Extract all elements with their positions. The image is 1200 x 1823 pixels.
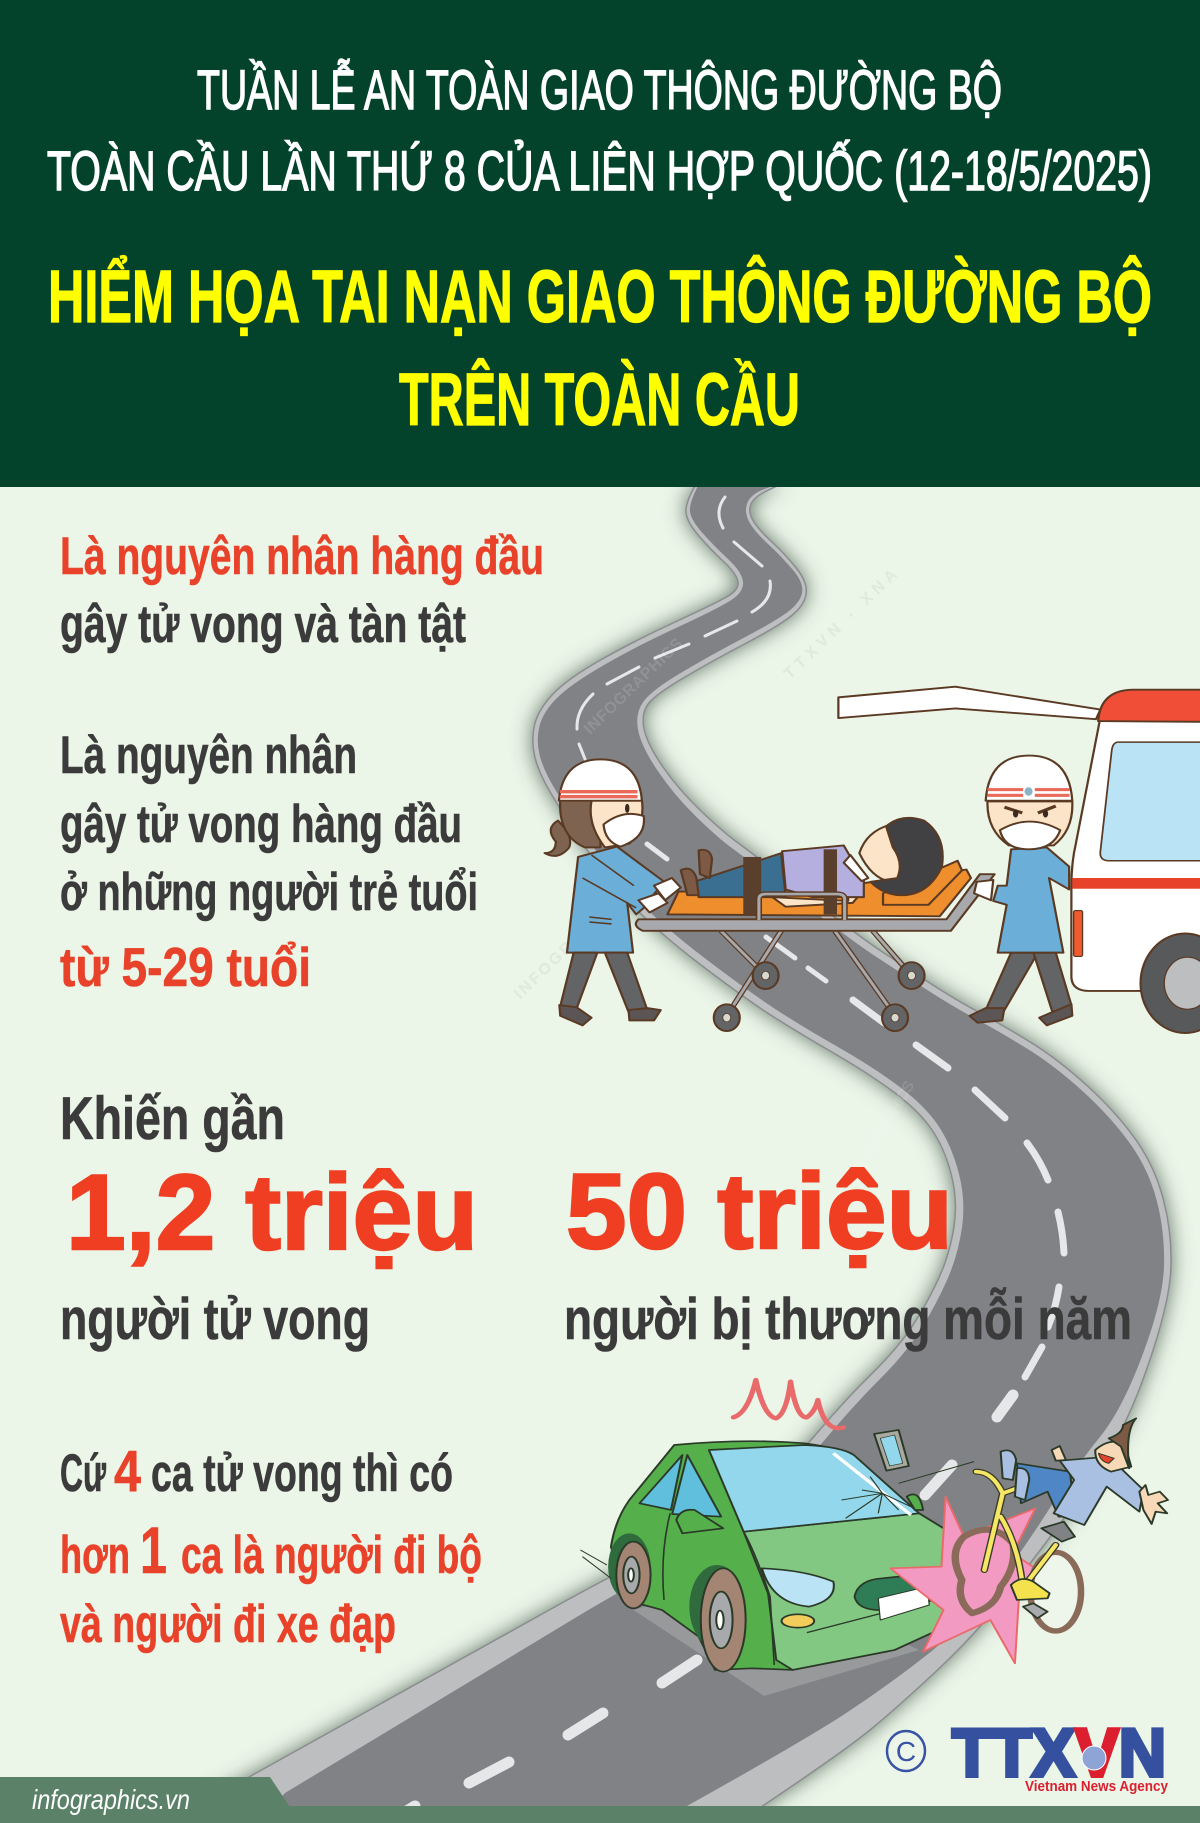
road shadow under car	[633, 1573, 919, 1696]
text block: pedestrians and cyclists: Cứ	[60, 1444, 106, 1503]
car body	[611, 1441, 954, 1670]
grille and plate	[855, 1572, 946, 1610]
text block: pedestrians and cyclists: 4	[114, 1439, 141, 1504]
stat: 50 million injured	[564, 1151, 1132, 1352]
text block: pedestrians and cyclists	[60, 1439, 482, 1654]
headlight	[762, 1568, 834, 1607]
text block: young people	[60, 726, 478, 998]
text block: pedestrians and cyclists: ca tử vong thì có	[151, 1444, 453, 1503]
windshield	[709, 1445, 919, 1532]
footer site label: infographics.vn	[32, 1784, 190, 1815]
stat: 1.2 million deaths	[60, 1085, 478, 1352]
watermarks: TTXVN - XNA	[781, 566, 901, 683]
illustration: right paramedic	[970, 756, 1072, 1025]
stat: 1.2 million deaths: 1,2 triệu	[66, 1152, 478, 1272]
text block: pedestrians and cyclists: hơn	[60, 1526, 130, 1585]
illustration: stretcher and patient	[636, 818, 995, 1031]
text block: leading cause	[60, 527, 544, 654]
watermarks	[511, 566, 919, 1182]
broken phone	[874, 1430, 909, 1471]
watermarks: INFOGRAPHICS	[849, 1078, 919, 1182]
watermarks: INFOGRAPHICS	[511, 886, 631, 1003]
front bicycle wheel	[955, 1530, 1014, 1613]
text block: young people: gây tử vong hàng đầu	[60, 795, 462, 854]
door seams	[663, 1513, 946, 1665]
header title	[47, 58, 1152, 441]
squiggle	[733, 1380, 844, 1428]
illustration: car accident	[580, 1380, 1168, 1696]
TTXVN logo: Vietnam News Agency	[1025, 1778, 1169, 1795]
text block: pedestrians and cyclists: và người đi xe đạp	[60, 1595, 396, 1654]
impact burst	[890, 1497, 1070, 1663]
windshield cracks	[842, 1462, 974, 1518]
text block: young people: ở những người trẻ tuổi	[60, 863, 478, 922]
illustration: left paramedic	[545, 759, 681, 1025]
text block: leading cause: gây tử vong và tàn tật	[60, 595, 466, 654]
stat: 1.2 million deaths: người tử vong	[60, 1287, 370, 1352]
stat: 1.2 million deaths: Khiến gần	[60, 1085, 285, 1152]
stat: 50 million injured: 50 triệu	[566, 1151, 953, 1271]
rear wheel	[608, 1533, 651, 1608]
footer	[0, 1777, 1200, 1823]
header title: TRÊN TOÀN CẦU	[399, 358, 800, 441]
text block: pedestrians and cyclists: ca là người đi bộ	[181, 1526, 482, 1585]
text block: pedestrians and cyclists: 1	[140, 1513, 167, 1587]
header band	[0, 0, 1200, 487]
TTXVN logo: C	[896, 1736, 916, 1767]
road	[180, 484, 1171, 1818]
text block: young people: Là nguyên nhân	[60, 726, 357, 785]
illustration: ambulance	[838, 687, 1200, 1033]
TTXVN logo: TTXVN	[952, 1715, 1166, 1791]
hood and bumper	[744, 1513, 954, 1670]
falling cyclist	[1017, 1463, 1075, 1517]
text block: leading cause: Là nguyên nhân hàng đầu	[60, 527, 544, 586]
fog light	[782, 1614, 814, 1628]
bicycle frame	[976, 1472, 1056, 1590]
watermarks: INFOGRAPHICS	[581, 635, 687, 738]
rear bicycle wheel	[1030, 1552, 1081, 1631]
text block: young people: từ 5-29 tuổi	[60, 936, 311, 998]
front wheel	[689, 1565, 746, 1672]
